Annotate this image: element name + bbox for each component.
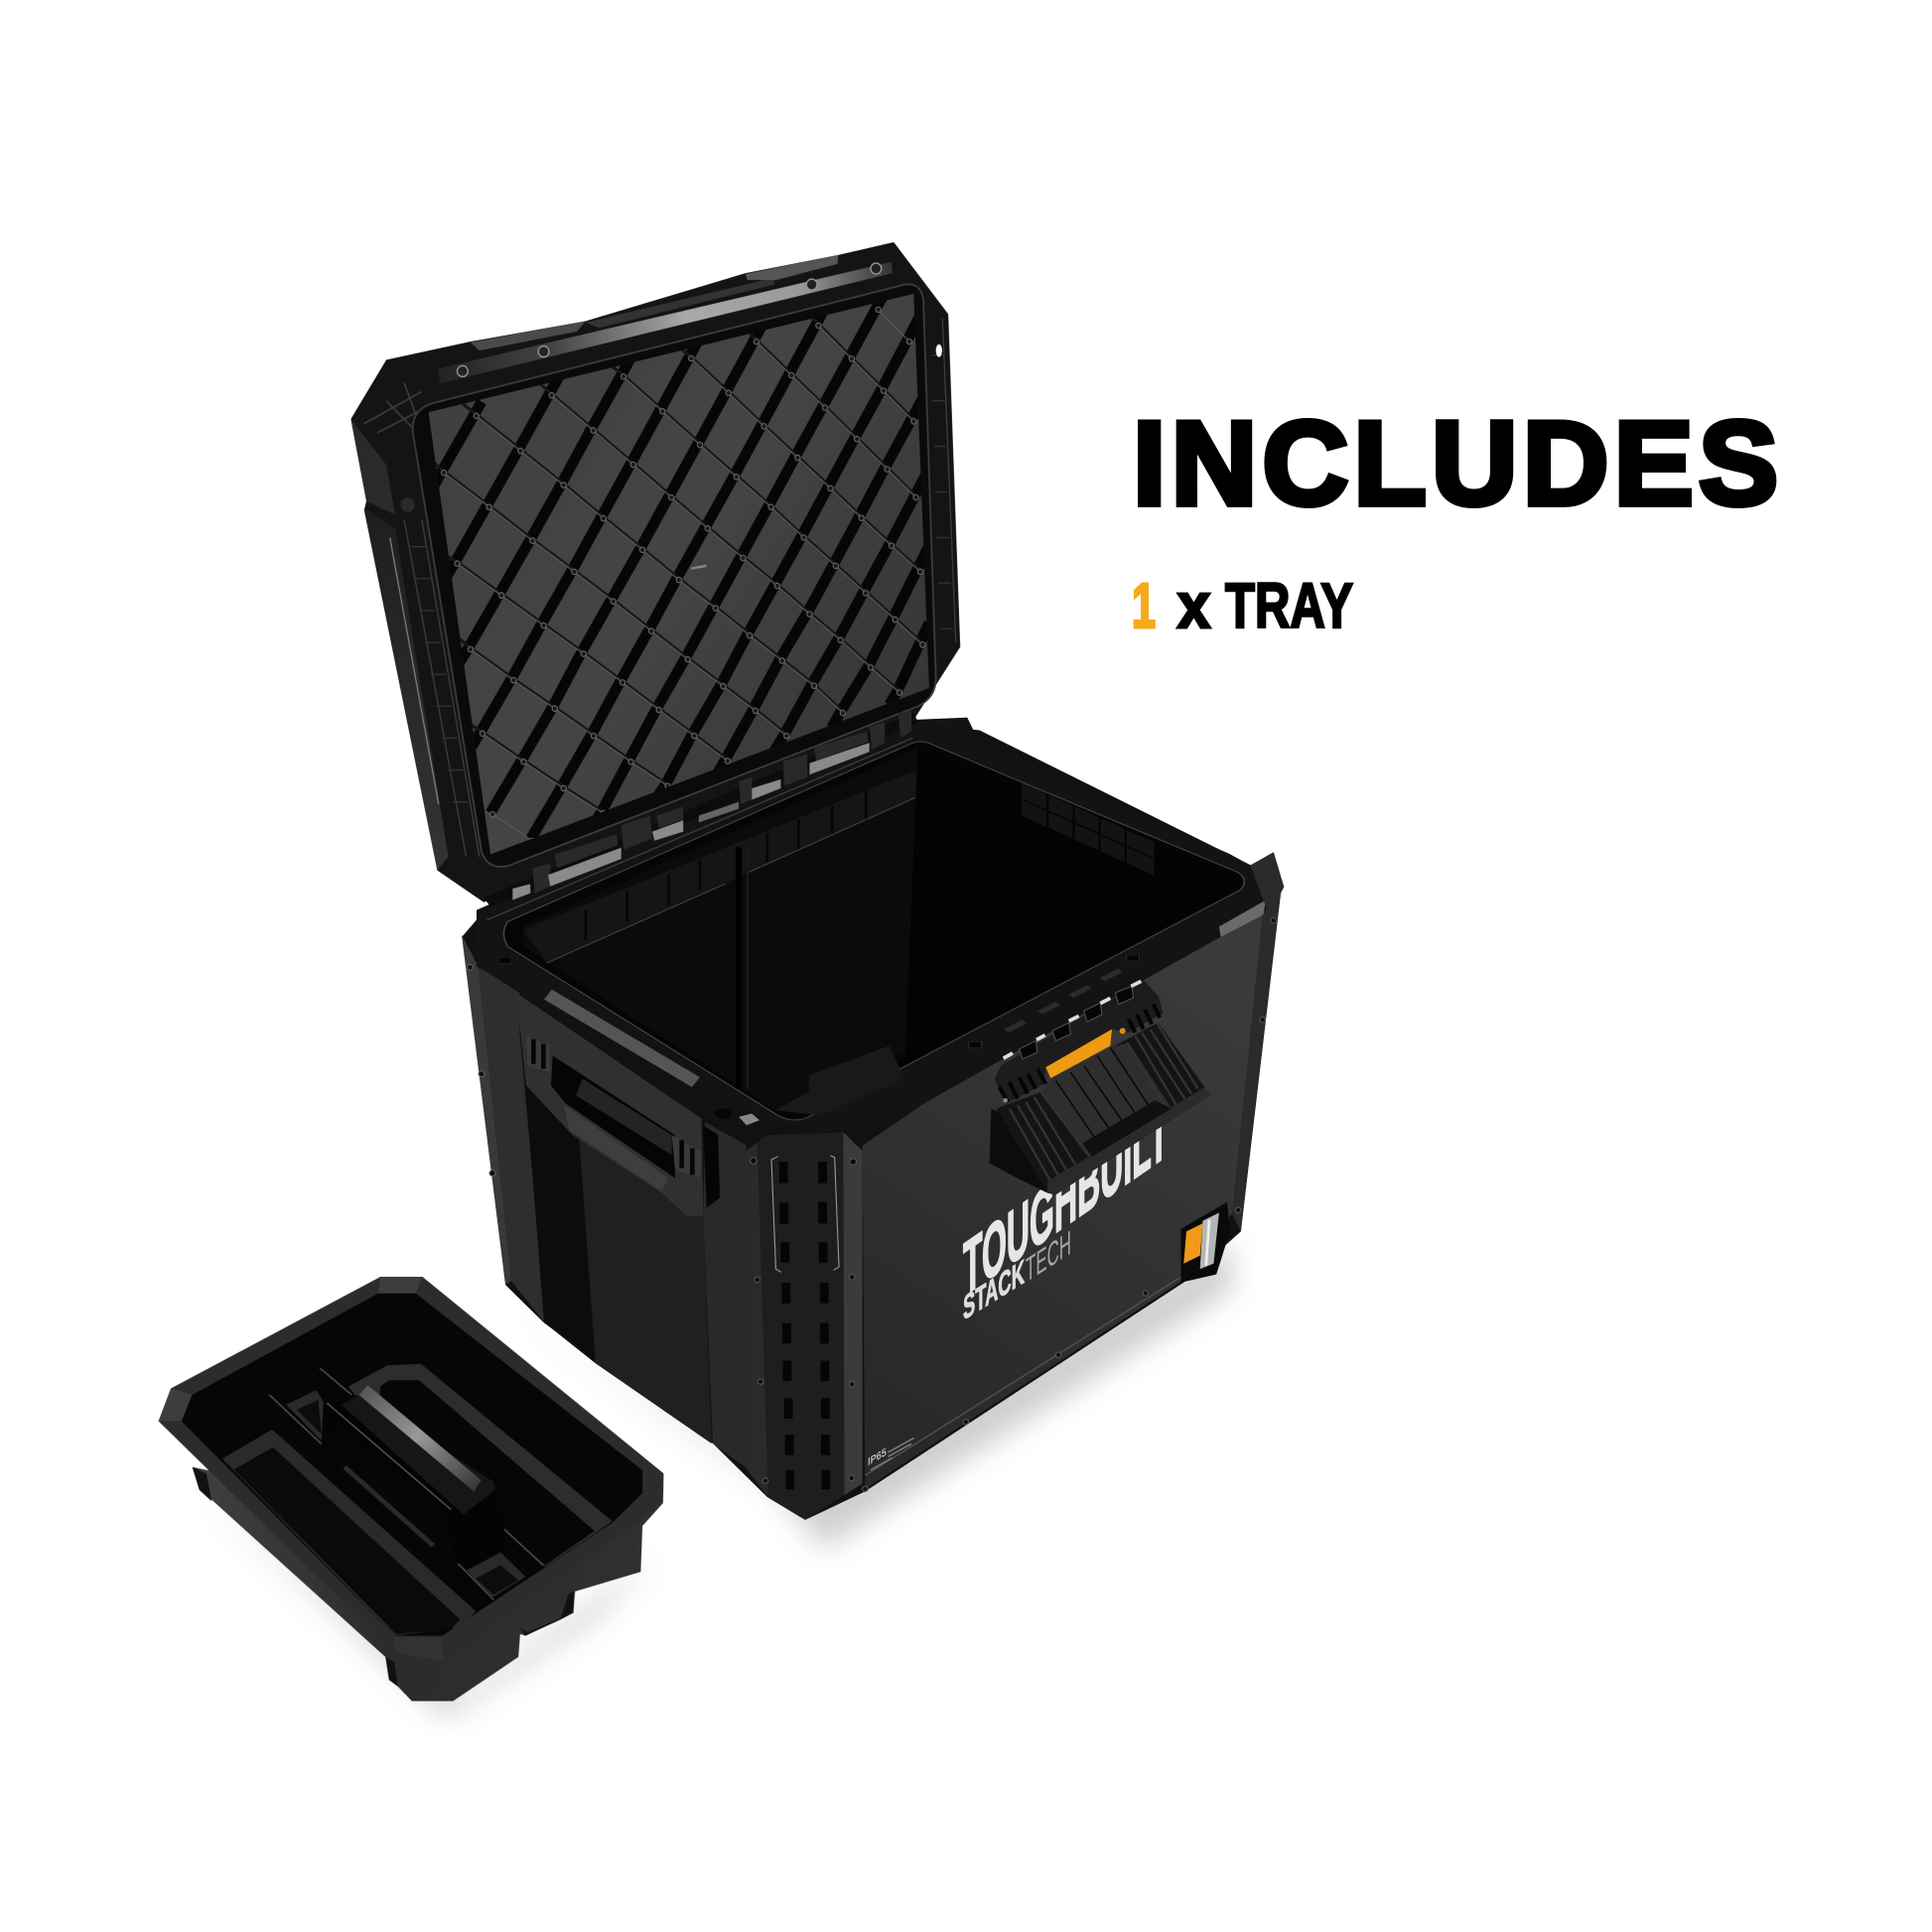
- quantity number: 1: [1132, 570, 1156, 641]
- infographic canvas: [159, 242, 1777, 1724]
- front panel: [863, 883, 1282, 1491]
- orange bar: [1045, 1030, 1112, 1078]
- rating label: IP65: IP65: [868, 1445, 887, 1468]
- lid shell: [350, 242, 960, 902]
- body silhouette backing: [462, 725, 1282, 1520]
- tray outer wall: [193, 1467, 663, 1702]
- lid metal strip: [437, 262, 893, 383]
- small wells: [286, 1390, 525, 1598]
- orange slider clip: [1181, 1202, 1230, 1283]
- right compartment: [348, 1364, 613, 1567]
- small center pin: [691, 566, 706, 569]
- opening: [503, 742, 1244, 1120]
- back-right wall: [809, 748, 1240, 1115]
- rim details: [498, 852, 1284, 1125]
- lid exterior top edges: [471, 255, 838, 350]
- tray rim corner highlights: [159, 1277, 444, 1662]
- lid outer frame ribs: [364, 314, 956, 857]
- lid side wall: [350, 419, 449, 871]
- lid hinges: [483, 711, 918, 906]
- corner column with slots: [746, 1132, 863, 1520]
- front panel and corner column: [746, 883, 1282, 1520]
- left side panels: [462, 935, 747, 1467]
- item name: TRAY: [1225, 570, 1353, 641]
- thin ribs with node markers: [444, 310, 922, 841]
- left side of box with carry handle: [462, 935, 747, 1467]
- object at bottom of interior: [775, 1045, 904, 1115]
- infographic canvas: TECH: [1026, 1222, 1071, 1290]
- list item: 1 x TRAY: [1132, 570, 1353, 641]
- box interior and top rim: [477, 718, 1284, 1134]
- latch flap: [996, 1023, 1209, 1194]
- latch recess shadow: [990, 1109, 1047, 1193]
- heading: INCLUDES: INCLUDES: [1133, 397, 1778, 530]
- open lid: [350, 242, 960, 906]
- cross rib shadows: [426, 313, 922, 812]
- tray: [159, 1277, 664, 1702]
- lid gasket ring: [413, 284, 936, 867]
- tray rim: [159, 1277, 664, 1662]
- thick diagonal ribs: [422, 292, 929, 842]
- tray inner well: [182, 1294, 642, 1636]
- multiplier x: x: [1177, 570, 1210, 641]
- back-left wall: [486, 738, 918, 1110]
- tray feet: [193, 1467, 573, 1687]
- latch sockets: [1004, 981, 1141, 1059]
- left compartment: [222, 1430, 476, 1636]
- floor shadows: [199, 1241, 1231, 1718]
- center handle: [320, 1385, 504, 1611]
- handle plate: [516, 993, 720, 1216]
- latch top plate: [995, 980, 1164, 1104]
- rating label: IP65: [868, 1438, 914, 1470]
- logo: STACK: STACK: [963, 1251, 1025, 1327]
- orange dot: [1120, 1028, 1126, 1034]
- infographic canvas: TOUGHBUILT: [963, 1086, 1169, 1312]
- lid inner grid: [422, 292, 929, 855]
- rim base: [477, 718, 1284, 1134]
- divider ribs: [269, 1368, 543, 1599]
- front latch: [990, 980, 1209, 1194]
